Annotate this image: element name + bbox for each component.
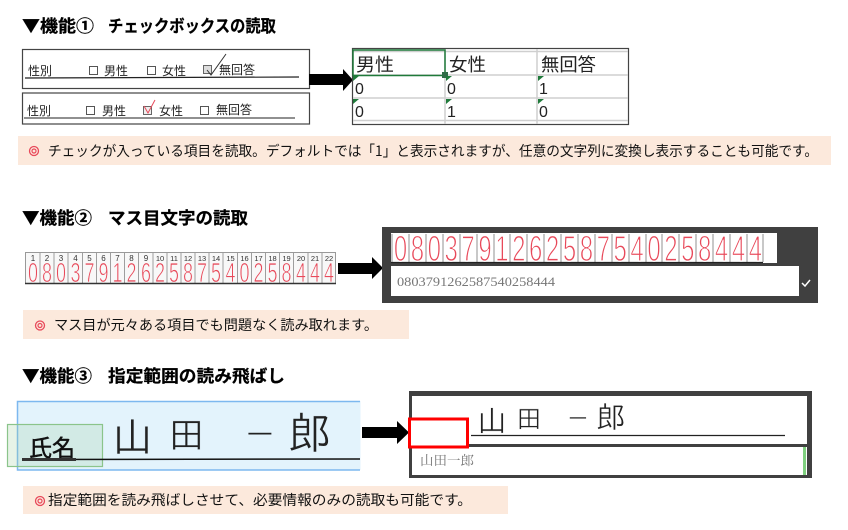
handwritten name xyxy=(477,402,626,436)
panel: handwritten grid strip: 16 xyxy=(240,254,249,263)
selected cell xyxy=(353,50,448,78)
form: second checkbox sample: 性別 xyxy=(27,102,51,119)
panel: handwritten grid strip: 20 xyxy=(297,254,305,263)
handwritten name: 山 xyxy=(112,416,153,457)
handwritten name: 郎 xyxy=(288,411,332,455)
handwritten name: 郎 xyxy=(596,402,626,432)
handwritten name: 田 xyxy=(516,406,542,432)
scanned strip: 0803791262587540258444 xyxy=(394,229,762,269)
callout: feature 3 note xyxy=(23,486,508,514)
form: second checkbox sample: 男性 xyxy=(102,102,126,119)
heading: feature 3: 指定範囲の読み飛ばし xyxy=(108,362,285,387)
handwritten name: 一 xyxy=(246,421,274,449)
input field: 0803791262587540258444 xyxy=(397,274,556,289)
callout: feature 2 note xyxy=(23,310,409,339)
heading: feature 3 xyxy=(22,362,285,387)
handwritten name xyxy=(112,411,332,457)
panel: handwritten grid strip: 17 xyxy=(254,254,263,263)
form: second checkbox sample: 女性 xyxy=(159,102,183,119)
heading: feature 2: マス目文字の読取 xyxy=(108,204,248,229)
table: spreadsheet result: 1 xyxy=(447,104,456,121)
table: spreadsheet result: 女性 xyxy=(449,55,486,75)
panel: handwritten grid strip: 15 xyxy=(226,254,235,263)
icon: check mark xyxy=(802,280,810,286)
panel: checkbox forms xyxy=(22,50,310,124)
panel: name field with skip range: 氏名 xyxy=(29,435,75,461)
callout: feature 1 note: チェックが入っている項目を読取。デフォルトでは「1」と表示されますが、任意の文字列に変換し表示することも可能です。 xyxy=(48,141,818,161)
panel: handwritten grid strip: 13 xyxy=(198,254,206,263)
callout: feature 1 note xyxy=(18,136,831,165)
form: second checkbox sample: 無回答 xyxy=(216,101,252,118)
skip range box xyxy=(8,424,102,466)
green status bar xyxy=(803,447,806,475)
panel: handwritten grid strip: 10 xyxy=(156,254,164,263)
underline shadow below label xyxy=(22,458,76,461)
table: spreadsheet result: 1 xyxy=(539,81,548,98)
heading: feature 1: チェックボックスの読取 xyxy=(108,12,276,37)
form: first checkbox sample: 女性 xyxy=(162,62,186,79)
form: first checkbox sample: 無回答 xyxy=(219,61,255,78)
arrow: strip to result xyxy=(338,257,383,279)
input field xyxy=(391,266,799,296)
form: second checkbox sample xyxy=(22,93,310,124)
panel: grid reading result xyxy=(382,227,818,303)
table: spreadsheet result: 0 xyxy=(355,81,364,98)
handwritten name: 山 xyxy=(477,406,507,436)
form: first checkbox sample: 男性 xyxy=(104,62,128,79)
panel: handwritten grid strip: 18 xyxy=(268,254,277,263)
panel: handwritten grid strip: 22 xyxy=(325,254,333,263)
callout: feature 2 note: マス目が元々ある項目でも問題なく読み取れます。 xyxy=(54,315,378,335)
heading: feature 3: ▼機能③ xyxy=(22,362,92,387)
cell numbers: 123456789 xyxy=(31,254,149,263)
panel: handwritten grid strip: 12 xyxy=(184,254,192,263)
heading: feature 1 xyxy=(22,12,276,37)
panel: handwritten grid strip xyxy=(25,252,336,288)
heading: feature 2: ▼機能② xyxy=(22,204,92,229)
table: spreadsheet result: 0 xyxy=(447,81,456,98)
table: spreadsheet result: 男性 xyxy=(356,55,394,75)
panel: skip range result: 山田一郎 xyxy=(420,453,474,468)
arrow: forms to spreadsheet xyxy=(309,69,353,91)
red skip box xyxy=(410,419,468,447)
panel: name field with skip range xyxy=(8,401,360,470)
panel: skip range result xyxy=(409,391,812,478)
panel: handwritten grid strip: 19 xyxy=(282,254,291,263)
panel: handwritten grid strip: 21 xyxy=(311,254,319,263)
heading: feature 2 xyxy=(22,204,248,229)
table: spreadsheet result: 0 xyxy=(355,104,364,121)
handwritten name: 田 xyxy=(168,416,205,453)
panel: handwritten grid strip: 14 xyxy=(212,254,220,263)
form: first checkbox sample: 性別 xyxy=(28,62,52,79)
callout: feature 3 note: 指定範囲を読み飛ばしさせて、必要情報のみの読取も可能です。 xyxy=(48,490,472,510)
table: spreadsheet result xyxy=(352,48,628,124)
table: spreadsheet result: 0 xyxy=(539,104,548,121)
form: first checkbox sample xyxy=(22,50,310,88)
table: spreadsheet result: 無回答 xyxy=(541,55,596,75)
handwritten digits: 0803791262587540258444 xyxy=(28,257,334,288)
heading: feature 1: ▼機能① xyxy=(22,12,94,37)
panel: handwritten grid strip: 11 xyxy=(170,254,178,263)
arrow: field to result xyxy=(362,421,409,444)
cell markers xyxy=(353,76,544,104)
handwritten name: 一 xyxy=(568,409,588,429)
